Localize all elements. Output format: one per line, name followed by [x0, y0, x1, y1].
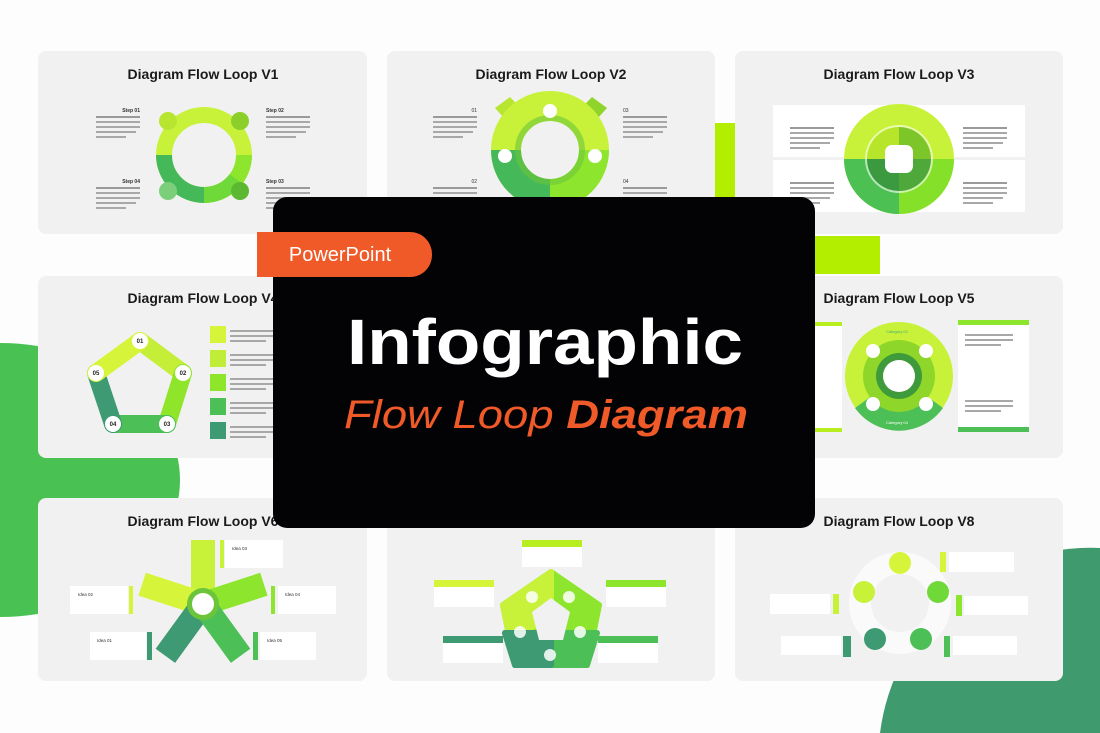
nodes V8 [853, 552, 949, 650]
text: step 01: Step 01 [122, 108, 140, 114]
pentagon diagram V7 [503, 572, 599, 665]
pentagon diagram V4: 05 [93, 371, 100, 377]
circle diagram V5: Category 02 [886, 329, 909, 334]
text: step 03: Step 03 [266, 179, 284, 185]
pentagon diagram V4: 03 [164, 422, 171, 428]
text: 04: 04 [623, 179, 629, 185]
heading: V8: Diagram Flow Loop V8 [824, 513, 975, 529]
background shape: lime band [714, 123, 736, 243]
ring V8 [860, 563, 940, 643]
text: step 01 [96, 108, 140, 138]
badge: PowerPoint [257, 232, 432, 277]
panel: V7 [387, 498, 715, 681]
circle diagram V3 [844, 104, 954, 214]
background shape: bottom-right green circle [880, 548, 1100, 733]
text: step 04 [96, 179, 140, 209]
text: step 02 [266, 108, 310, 138]
text: 03: 03 [623, 108, 629, 114]
ring diagram V2 [495, 97, 607, 194]
pentagon diagram V4: 01 [137, 339, 144, 345]
panel: V1 [38, 51, 367, 234]
star diagram V6 [138, 540, 268, 663]
black title card [273, 197, 815, 528]
panel: V8 [735, 498, 1063, 681]
panel: V6 [38, 498, 367, 681]
idea boxes V6: Idea 03 [232, 546, 248, 551]
text: step 04: Step 04 [122, 179, 140, 185]
idea boxes V6: Idea 02 [78, 592, 94, 597]
badge: PowerPoint: PowerPoint [289, 244, 392, 266]
text: 01 [433, 108, 477, 138]
vision boxes V7 [434, 540, 666, 663]
ring diagram V1 [159, 112, 249, 200]
idea boxes V6 [70, 540, 336, 660]
text: step 02: Step 02 [266, 108, 284, 114]
text: 01: 01 [471, 108, 477, 114]
pentagon diagram V4: 04 [110, 422, 117, 428]
background shape: lime block [810, 236, 880, 274]
idea boxes V6: Idea 04 [285, 592, 301, 597]
panel: V4 [38, 276, 367, 458]
panel: V2 [387, 51, 715, 234]
text: 02 [433, 179, 477, 209]
main title: Infographic [347, 306, 743, 378]
background shape: left green circle [0, 343, 180, 617]
subtitle: Flow Loop Diagram [344, 393, 748, 437]
list squares V4 [210, 326, 278, 439]
heading: V4: Diagram Flow Loop V4 [128, 290, 279, 306]
heading: V2: Diagram Flow Loop V2 [476, 66, 627, 82]
idea boxes V6: Idea 05 [267, 638, 283, 643]
heading: V3: Diagram Flow Loop V3 [824, 66, 975, 82]
heading: V6: Diagram Flow Loop V6 [128, 513, 279, 529]
circle diagram V5 [845, 322, 953, 431]
pentagon diagram V4 [88, 333, 191, 432]
pentagon diagram V4: 02 [180, 371, 187, 377]
text: 02: 02 [471, 179, 477, 185]
text: 04 [623, 179, 667, 209]
idea boxes V6: Idea 01 [97, 638, 113, 643]
circle diagram V5: Category 04 [886, 420, 909, 425]
heading: V5: Diagram Flow Loop V5 [824, 290, 975, 306]
text boxes V8 [770, 552, 1028, 657]
panel: V3 [735, 51, 1063, 234]
text: step 03 [266, 179, 310, 209]
heading: V1: Diagram Flow Loop V1 [128, 66, 279, 82]
panel: V5 [735, 276, 1063, 458]
text: 03 [623, 108, 667, 138]
